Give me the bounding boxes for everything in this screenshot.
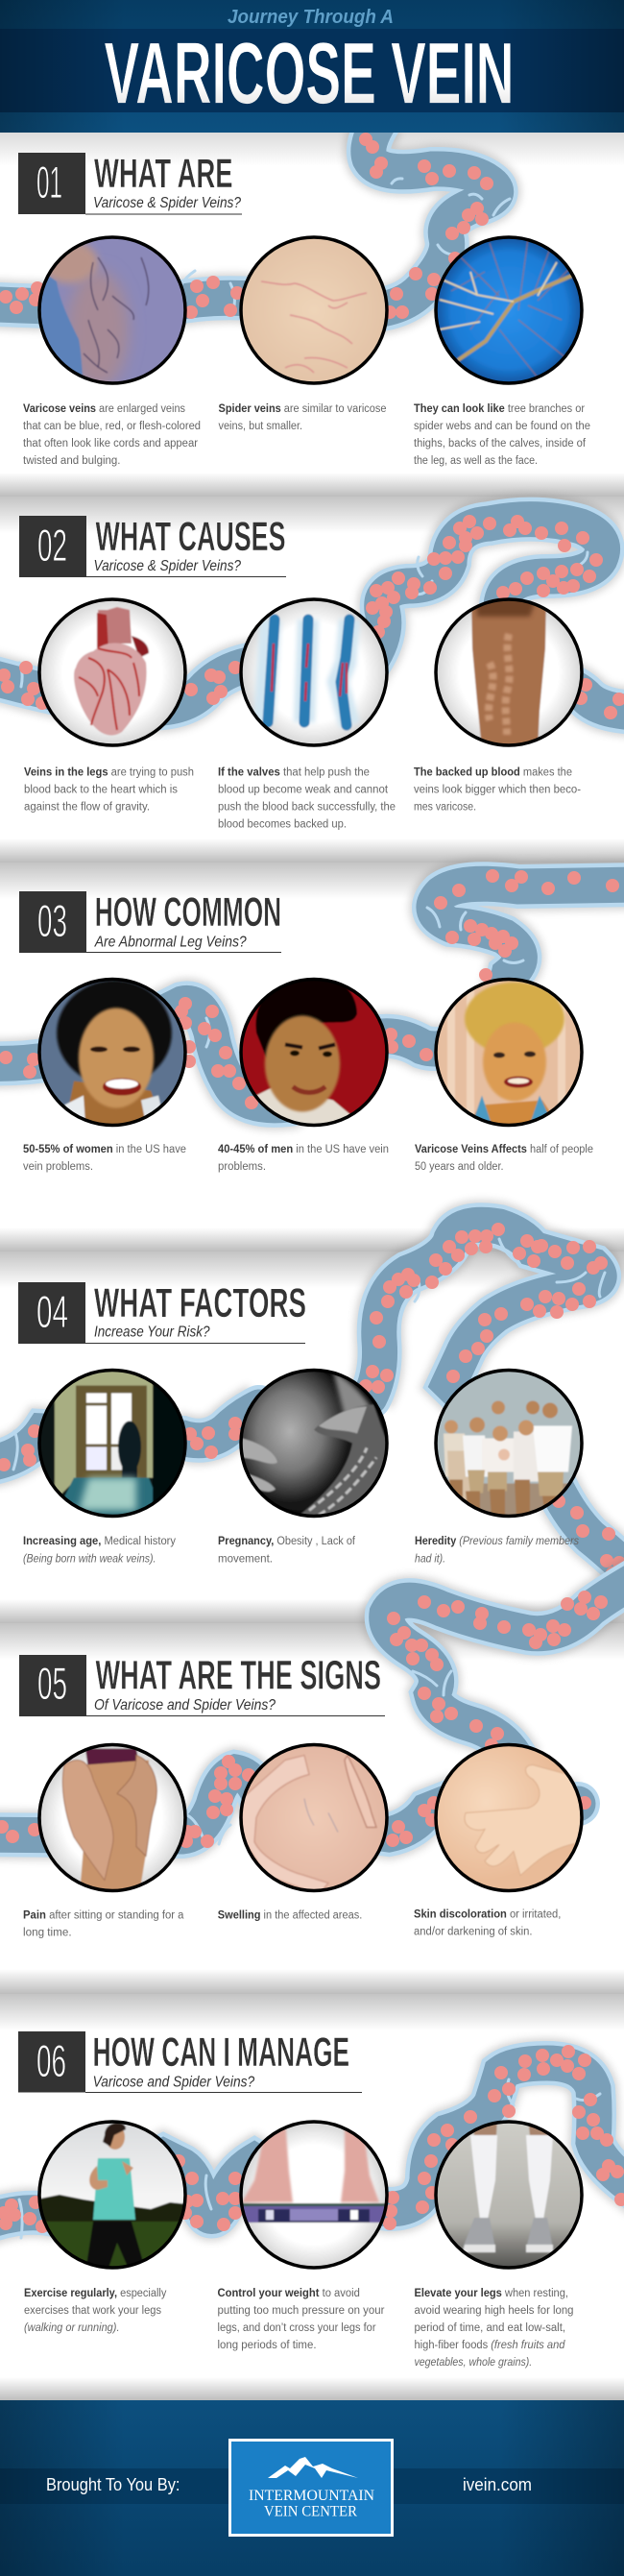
caption: exercise: (walking or running). (24, 2322, 119, 2334)
vein: section 1 (0, 120, 510, 312)
section number 05 (19, 1655, 86, 1716)
heading: what factors: WHAT FACTORS (94, 1280, 306, 1326)
caption: spider veins (219, 403, 386, 432)
photo: man (237, 976, 391, 1133)
section number 06 (18, 2031, 85, 2092)
caption: women: 50-55% of women in the US have (23, 1144, 186, 1155)
heading: what are the signs: WHAT ARE THE SIGNS (96, 1652, 381, 1698)
logo subname: VEIN CENTER (264, 2503, 357, 2520)
subtitle: Are Abnormal Leg Veins? (94, 934, 247, 951)
caption: look like: thighs, backs of the calves, inside of (414, 438, 587, 450)
vein: section 5 (0, 1575, 624, 1844)
caption: look like (414, 403, 590, 467)
panel: 04 what factors (18, 1280, 586, 1566)
caption: men: problems. (218, 1161, 266, 1173)
subtitle: Of Varicose and Spider Veins? (94, 1697, 276, 1713)
caption: varicose veins (23, 403, 201, 467)
kicker: Journey Through A: Journey Through A (228, 7, 394, 28)
caption: pregnancy: Pregnancy, Obesity , Lack of (218, 1536, 356, 1547)
caption: pain: Pain after sitting or standing for a (23, 1909, 184, 1921)
photo: swelling (237, 1740, 391, 1894)
subtitle: Varicose and Spider Veins? (93, 2075, 254, 2090)
caption: half of people (415, 1144, 593, 1173)
caption: pain: long time. (23, 1927, 72, 1938)
section number 03: 03 (37, 895, 67, 946)
caption: pregnancy: movement. (218, 1554, 273, 1566)
caption: women: vein problems. (23, 1161, 93, 1173)
heading: how common: HOW COMMON (95, 889, 281, 936)
caption: control weight: legs, and don’t cross your legs for (217, 2322, 376, 2334)
caption: veins in the legs (24, 766, 194, 813)
subtitle: Increase Your Risk? (94, 1324, 210, 1341)
caption: skin discoloration (414, 1909, 561, 1938)
caption: skin discoloration: Skin discoloration or irritated, (414, 1909, 561, 1921)
caption: half of people: Varicose Veins Affects half of people (415, 1144, 593, 1155)
photo: older woman (432, 976, 586, 1130)
caption: control weight (217, 2288, 385, 2351)
section number 02 (19, 516, 86, 577)
photo: skin scratching (432, 1740, 586, 1894)
caption: men: 40-45% of men in the US have vein (218, 1144, 389, 1155)
caption: heredity (415, 1536, 579, 1566)
caption: elevate legs: avoid wearing high heels for long (415, 2305, 574, 2317)
caption: backed up blood: The backed up blood makes the (414, 766, 572, 778)
icon: mountains (268, 2457, 358, 2478)
caption: look like: They can look like tree branches or (414, 403, 585, 415)
header banner (0, 0, 624, 133)
caption: backed up blood: mes varicose. (414, 801, 476, 813)
section number 02: 02 (37, 520, 67, 571)
caption: heredity: Heredity (Previous family members (415, 1536, 579, 1547)
photo: heart (36, 595, 189, 749)
caption: half of people: 50 years and older. (415, 1161, 503, 1173)
section number 01: 01 (36, 157, 62, 207)
caption: control weight: putting too much pressure on your (217, 2305, 385, 2317)
caption: elevate legs: vegetables, whole grains). (415, 2357, 532, 2369)
photo: pregnant belly (237, 1366, 391, 1519)
caption: veins in the legs: against the flow of gravity. (24, 801, 150, 813)
photo: bulging leg (432, 595, 586, 749)
caption: exercise: exercises that work your legs (24, 2305, 161, 2317)
caption: increasing age: (Being born with weak veins). (23, 1554, 156, 1566)
photo: tree branches (432, 233, 586, 387)
caption: women (23, 1144, 186, 1173)
caption: swelling: Swelling in the affected areas. (218, 1909, 362, 1921)
panel: 03 how common (19, 889, 593, 1173)
caption: pregnancy (218, 1536, 356, 1566)
photo: compression socks (432, 2118, 586, 2272)
section number 03 (19, 891, 86, 953)
caption: veins in the legs: blood back to the heart which is (24, 784, 178, 795)
caption: elevate legs: period of time, and eat low-salt, (415, 2322, 565, 2334)
caption: increasing age: Increasing age, Medical history (23, 1536, 176, 1547)
section number 05: 05 (37, 1658, 67, 1709)
caption: men (218, 1144, 389, 1173)
subtitle: Varicose & Spider Veins? (93, 195, 241, 211)
photo: woman (36, 976, 189, 1130)
caption: valves: push the blood back successfully, the (218, 801, 396, 813)
brought to you by: Brought To You By: (46, 2475, 180, 2494)
caption: backed up blood: veins look bigger which then beco- (414, 784, 581, 795)
vein: section 6 (0, 2052, 624, 2238)
logo name: INTERMOUNTAIN (249, 2488, 374, 2504)
vein: section 3 (0, 876, 624, 1106)
caption: valves: blood becomes backed up. (218, 818, 347, 830)
caption: control weight: long periods of time. (217, 2340, 317, 2351)
section number 04: 04 (36, 1286, 68, 1337)
photo: spider veins (237, 233, 391, 387)
panel: 05 what are the signs (19, 1652, 586, 1938)
section number 01 (18, 153, 85, 214)
heading: what are: WHAT ARE (94, 151, 232, 197)
caption: elevate legs: high-fiber foods (fresh fruits and (415, 2340, 565, 2351)
section number 04 (18, 1282, 85, 1344)
heading: what causes: WHAT CAUSES (96, 514, 286, 560)
caption: look like: the leg, as well as the face. (414, 455, 538, 467)
caption: varicose veins: twisted and bulging. (23, 455, 121, 467)
heading: how can i manage: HOW CAN I MANAGE (93, 2029, 349, 2076)
caption: varicose veins: that can be blue, red, or flesh-colored (23, 421, 201, 432)
caption: control weight: Control your weight to avoid (217, 2288, 360, 2299)
panel: 02 what causes (19, 514, 586, 830)
panel: 01 what are (18, 151, 590, 467)
photo: hallway (36, 1366, 191, 1519)
website: ivein.com (463, 2475, 532, 2494)
caption: varicose veins: that often look like cords and appear (23, 438, 198, 450)
caption: heredity: had it). (415, 1554, 445, 1566)
section number 06: 06 (36, 2035, 66, 2086)
caption: exercise: Exercise regularly, especially (24, 2288, 167, 2299)
vein: section 2 (0, 520, 624, 713)
panel: 06 how can i manage (18, 2029, 586, 2369)
photo: knee pain (36, 1740, 189, 1894)
caption: valves: If the valves that help push the (218, 766, 370, 778)
caption: backed up blood (414, 766, 581, 813)
caption: elevate legs (415, 2288, 574, 2369)
caption: spider veins: Spider veins are similar to varicose (219, 403, 386, 415)
photo: vein valves (237, 595, 391, 749)
caption: skin discoloration: and/or darkening of skin. (414, 1927, 532, 1938)
caption: elevate legs: Elevate your legs when resting, (415, 2288, 568, 2299)
footer (0, 2400, 624, 2576)
photo: varicose leg (36, 233, 189, 389)
vein: section 4 (0, 1225, 624, 1585)
logo: intermountain vein center (230, 2440, 392, 2536)
caption: increasing age (23, 1536, 176, 1566)
caption: valves (218, 766, 396, 830)
photo: feet on scale (237, 2118, 391, 2272)
caption: valves: blood up become weak and cannot (218, 784, 389, 795)
caption: look like: spider webs and can be found on the (414, 421, 590, 432)
caption: veins in the legs: Veins in the legs are trying to push (24, 766, 194, 778)
caption: spider veins: veins, but smaller. (219, 421, 302, 432)
caption: exercise (24, 2288, 167, 2334)
photo: runner (36, 2118, 189, 2272)
photo: family (432, 1366, 586, 1521)
caption: pain (23, 1909, 184, 1938)
subtitle: Varicose & Spider Veins? (94, 558, 241, 574)
caption: varicose veins: Varicose veins are enlarged veins (23, 403, 185, 415)
